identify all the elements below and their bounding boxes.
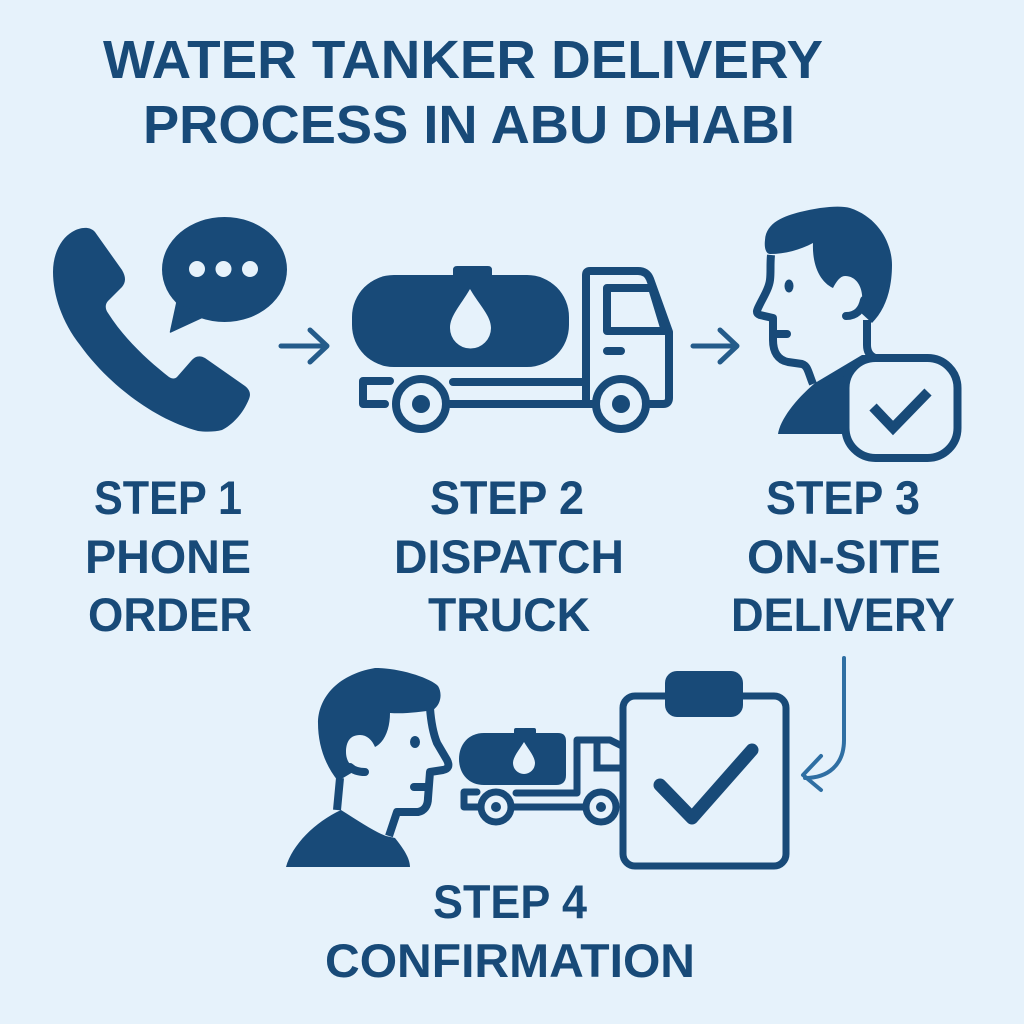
label: step 4: STEP 4: [433, 875, 587, 928]
label: step 2: STEP 2: [430, 471, 584, 524]
icon: tanker truck: [352, 266, 669, 429]
icon: small tanker truck: [459, 728, 622, 822]
icon: customer profile: [286, 668, 448, 867]
arrow: step 2 to step 3: [693, 330, 737, 362]
label: step 1: STEP 1: [94, 471, 242, 524]
label: step 3: DELIVERY: [731, 588, 955, 641]
label: step 4: [325, 875, 695, 987]
title: [103, 30, 823, 155]
icon: clipboard with checkmark: [623, 671, 786, 866]
icon: person with check badge: [757, 207, 958, 458]
label: step 3: STEP 3: [766, 471, 920, 524]
arrow: step 3 to step 4: [803, 658, 844, 790]
label: step 3: ON-SITE: [747, 530, 941, 583]
label: step 1: ORDER: [88, 588, 252, 641]
label: step 3: [731, 471, 955, 641]
label: step 4: CONFIRMATION: [325, 934, 695, 987]
label: step 2: [394, 471, 624, 641]
label: step 1: [85, 471, 252, 641]
label: step 2: TRUCK: [428, 588, 590, 641]
label: step 2: DISPATCH: [394, 530, 624, 583]
arrow: step 1 to step 2: [281, 330, 327, 362]
title: PROCESS IN ABU DHABI: [143, 95, 795, 155]
title: WATER TANKER DELIVERY: [103, 30, 823, 90]
label: step 1: PHONE: [85, 530, 251, 583]
icon: phone with speech bubble: [53, 217, 287, 432]
